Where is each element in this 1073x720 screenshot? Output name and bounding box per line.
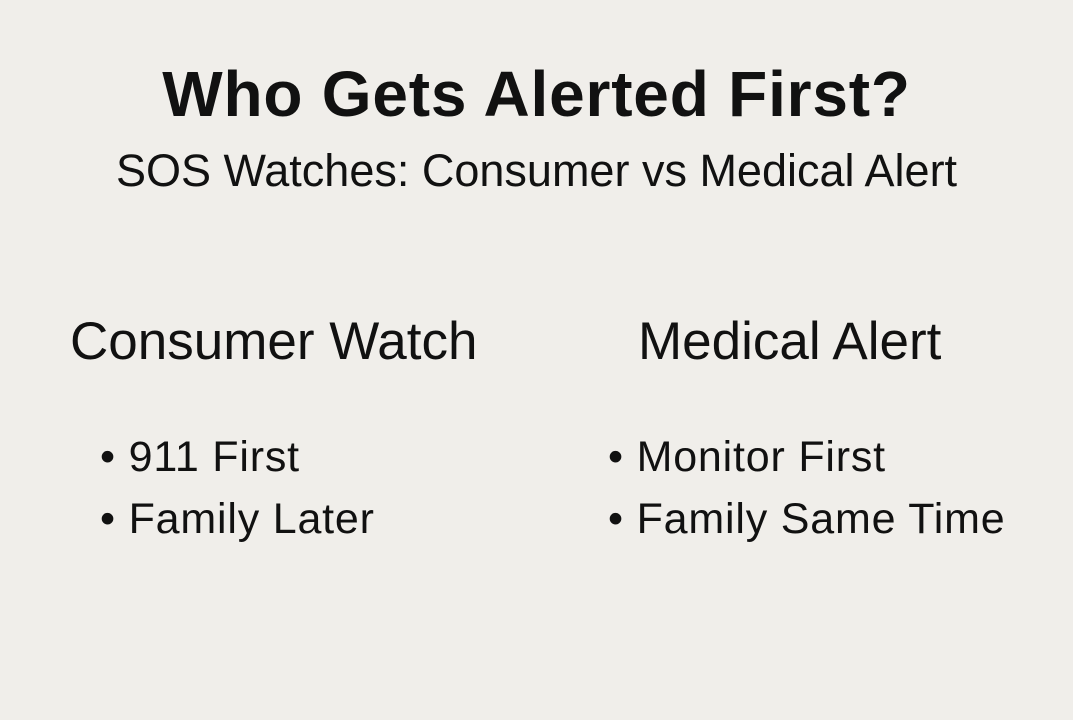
heading: medical alert: Medical Alert — [638, 312, 941, 371]
bullet list: medical — [608, 433, 1005, 543]
heading: consumer watch: Consumer Watch — [70, 312, 477, 371]
bullet list: consumer: • 911 First — [100, 433, 300, 481]
title: Who Gets Alerted First? — [162, 58, 911, 130]
bullet list: medical: • Monitor First — [608, 433, 886, 481]
bullet list: consumer — [100, 433, 375, 543]
subtitle: SOS Watches: Consumer vs Medical Alert — [116, 145, 957, 196]
bullet list: medical: • Family Same Time — [608, 495, 1005, 543]
bullet list: consumer: • Family Later — [100, 495, 375, 543]
panel: consumer watch — [70, 312, 477, 543]
panel: medical alert — [608, 312, 1005, 543]
